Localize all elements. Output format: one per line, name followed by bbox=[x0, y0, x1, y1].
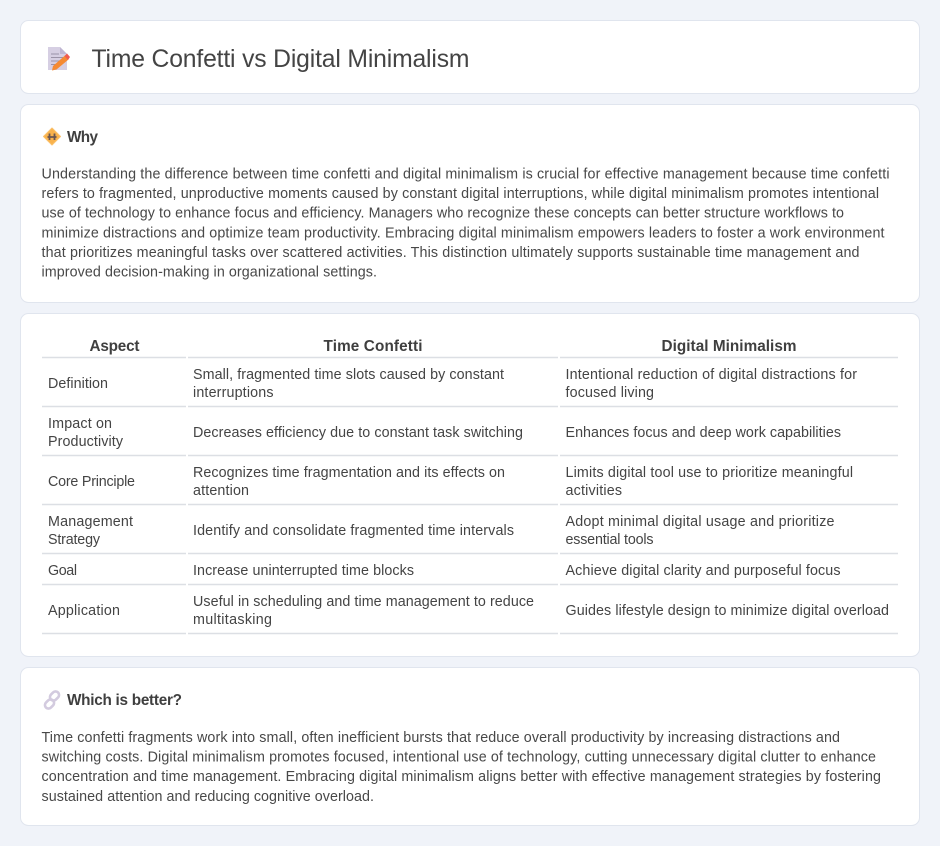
table row: core principle: attention bbox=[193, 483, 249, 499]
text block: why paragraph: Understanding the difference between time confetti and digital minimalism is crucial for effective management because time confetti bbox=[42, 166, 890, 182]
heading: why: Why bbox=[67, 129, 98, 146]
table row: management strategy: Identify and consolidate fragmented time intervals bbox=[193, 523, 514, 539]
table row: definition: Definition bbox=[48, 376, 108, 392]
text block: which is better paragraph: switching costs. Digital minimalism promotes focused, intentional use of technology, cutting unnecessary digital clutter to enhance bbox=[42, 750, 876, 766]
table row: core principle: Recognizes time fragmentation and its effects on bbox=[193, 465, 505, 481]
text block: why paragraph bbox=[42, 166, 890, 280]
text block: why paragraph: that prioritizes meaningful tasks over scattered activities. This distinction ultimately supports sustainable time management and bbox=[42, 245, 860, 261]
table row: definition: Intentional reduction of digital distractions for bbox=[566, 367, 857, 383]
table row: application: Useful in scheduling and time management to reduce bbox=[193, 594, 534, 610]
heading: which is better: Which is better? bbox=[67, 692, 182, 709]
table row: core principle: Limits digital tool use to prioritize meaningful bbox=[566, 465, 853, 481]
table row: goal: Goal bbox=[48, 563, 77, 579]
table row: impact on productivity: Enhances focus and deep work capabilities bbox=[566, 425, 841, 441]
table row: management strategy: essential tools bbox=[566, 532, 654, 548]
table row: impact on productivity: Decreases efficiency due to constant task switching bbox=[193, 425, 523, 441]
table row: management strategy: Management bbox=[48, 514, 133, 530]
panel: which is better bbox=[20, 668, 920, 826]
text block: why paragraph: minimize distractions and optimize team productivity. Embracing digital minimalism empowers leaders to foster a work environment bbox=[42, 225, 885, 241]
panel: why bbox=[20, 104, 920, 302]
text block: which is better paragraph: concentration and time management. Embracing digital minimalism aligns better with effective management strategies by fostering bbox=[42, 769, 881, 785]
table row: core principle bbox=[42, 465, 898, 504]
icon: document with pencil bbox=[48, 47, 70, 70]
table row: core principle: activities bbox=[566, 483, 622, 499]
text block: which is better paragraph bbox=[42, 730, 881, 805]
table row: impact on productivity: Productivity bbox=[48, 434, 124, 450]
table header row: Aspect bbox=[90, 338, 140, 355]
table row: definition: Small, fragmented time slots caused by constant bbox=[193, 367, 504, 383]
text block: which is better paragraph: Time confetti fragments work into small, often inefficient bursts that reduce overall productivity by increasing distractions and bbox=[42, 730, 840, 746]
table row: application: multitasking bbox=[193, 612, 272, 628]
table row: application: Application bbox=[48, 603, 120, 619]
panel: comparison table bbox=[20, 314, 920, 656]
text block: why paragraph: refers to fragmented, unproductive moments caused by constant digital interruptions, while digital minimalism promotes intentional bbox=[42, 186, 879, 202]
panel: page header bbox=[20, 20, 920, 94]
table row: goal bbox=[42, 563, 898, 584]
table row: definition bbox=[42, 367, 898, 406]
table row: application bbox=[42, 594, 898, 634]
table row: management strategy bbox=[42, 514, 898, 554]
table row: definition: interruptions bbox=[193, 385, 274, 401]
table row: management strategy: Adopt minimal digital usage and prioritize bbox=[566, 514, 835, 530]
text block: why paragraph: use of technology to enhance focus and efficiency. Managers who recognize these concepts can better structure workflows to bbox=[42, 206, 844, 222]
table row: goal: Achieve digital clarity and purposeful focus bbox=[566, 563, 840, 579]
table header row: Time Confetti bbox=[324, 338, 422, 355]
title: Time Confetti vs Digital Minimalism bbox=[92, 46, 470, 73]
icon: orange diamond sign bbox=[44, 128, 60, 145]
table header row: Digital Minimalism bbox=[662, 338, 796, 355]
table row: application: Guides lifestyle design to minimize digital overload bbox=[566, 603, 889, 619]
table row: impact on productivity bbox=[42, 416, 898, 456]
text block: which is better paragraph: sustained attention and reducing cognitive overload. bbox=[42, 789, 374, 805]
table row: goal: Increase uninterrupted time blocks bbox=[193, 563, 414, 579]
table row: core principle: Core Principle bbox=[48, 474, 135, 490]
table row: management strategy: Strategy bbox=[48, 532, 101, 548]
table row: impact on productivity: Impact on bbox=[48, 416, 112, 432]
table header row bbox=[42, 338, 898, 358]
icon: chain link bbox=[43, 690, 61, 710]
text block: why paragraph: improved decision-making in organizational settings. bbox=[42, 264, 377, 280]
table row: definition: focused living bbox=[566, 385, 654, 401]
